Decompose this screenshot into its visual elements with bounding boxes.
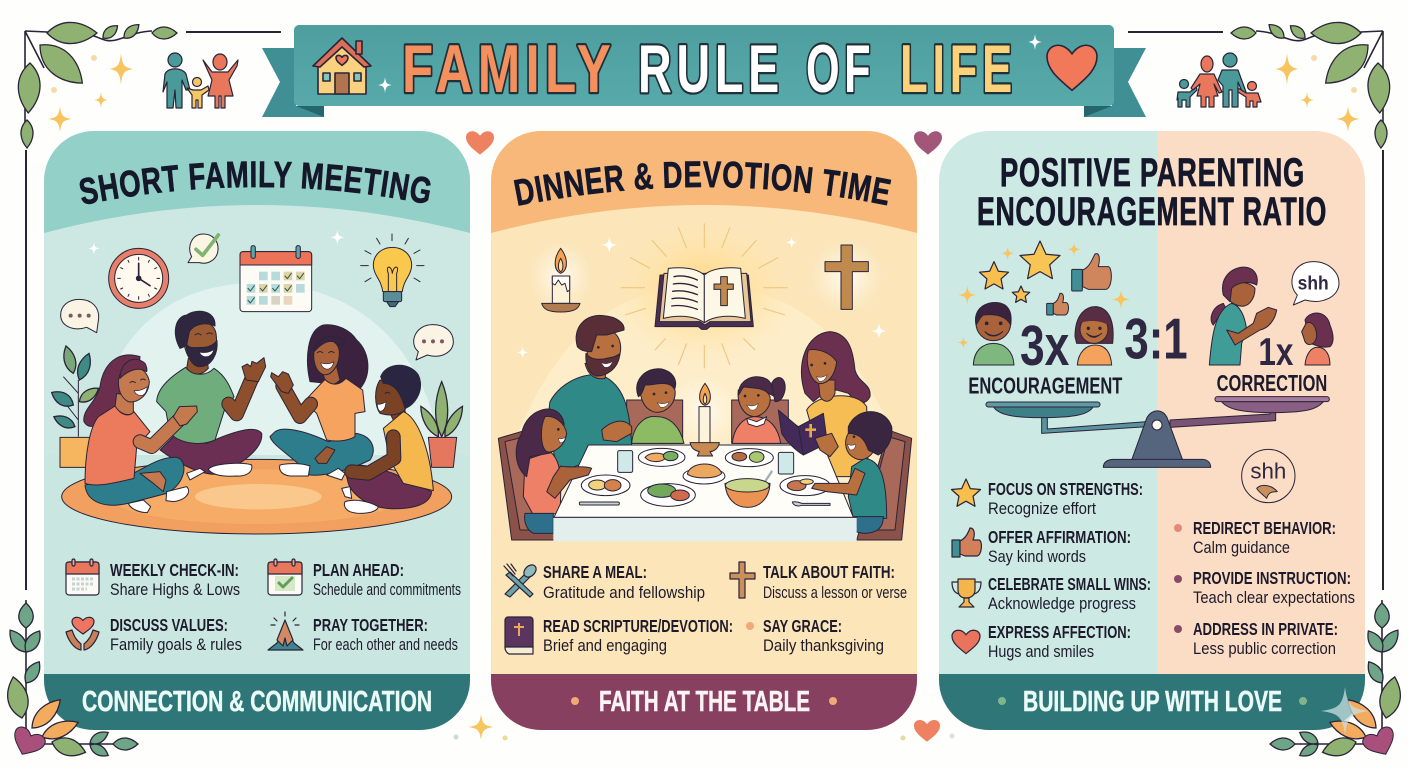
illustration: family dinner — [498, 213, 912, 541]
list: dinner items — [504, 562, 907, 655]
heading: SHORT FAMILY MEETING — [80, 161, 431, 204]
item: redirect behavior: Calm guidance — [1193, 538, 1290, 557]
icon: calendar — [240, 246, 312, 312]
decoration: top left vine — [17, 21, 177, 148]
parent correcting child — [1209, 262, 1339, 365]
item: focus on strengths: Recognize effort — [988, 499, 1096, 518]
icon: shh circle — [1242, 449, 1295, 503]
footer band: building up with love — [939, 674, 1365, 730]
list: encouragement items — [951, 479, 1151, 661]
item: offer affirmation: Say kind words — [988, 547, 1086, 566]
ratio 3:1: 3:1 — [1124, 307, 1188, 371]
speech text shh: shh — [1298, 273, 1329, 294]
ratio 1x: 1x — [1258, 330, 1293, 374]
icon: bible — [505, 617, 533, 654]
item: provide instruction — [1193, 568, 1355, 607]
illustration: balance scale — [957, 241, 1339, 503]
footer band: connection and communication — [44, 674, 470, 730]
arm: son right reaching to plate — [812, 468, 865, 495]
list: meeting items — [66, 559, 461, 654]
footer band: connection and communication: CONNECTION & COMMUNICATION — [82, 686, 432, 718]
heading — [977, 151, 1327, 234]
item: provide instruction: PROVIDE INSTRUCTION: — [1193, 568, 1351, 588]
label encouragement: ENCOURAGEMENT — [968, 372, 1122, 398]
table — [553, 445, 857, 541]
title banner — [262, 25, 1146, 117]
icon: plan calendar — [268, 559, 302, 595]
ribbon tail right — [1084, 48, 1146, 117]
item: share a meal: Gratitude and fellowship — [543, 583, 705, 602]
icon: praying hands — [268, 612, 303, 650]
title text: RULE — [638, 31, 784, 107]
light rays — [621, 223, 788, 368]
item: pray together: PRAY TOGETHER: — [313, 615, 428, 635]
item: read scripture: Brief and engaging — [543, 636, 667, 655]
item: redirect behavior: REDIRECT BEHAVIOR: — [1193, 518, 1336, 538]
title text — [402, 31, 1017, 107]
icon: wall candle — [542, 248, 580, 312]
panel: short family meeting — [44, 131, 470, 730]
item: say grace: SAY GRACE: — [763, 616, 842, 636]
icon: family of four — [1177, 53, 1261, 107]
icon: coral heart between panels — [466, 131, 494, 155]
icon: faint corner sparkle — [1321, 687, 1369, 735]
arm: child left reaching to table — [547, 466, 592, 498]
item: focus on strengths — [988, 479, 1143, 518]
icon: star — [951, 479, 981, 506]
icon: shh circle: shh — [1250, 459, 1286, 484]
scale — [986, 397, 1329, 467]
children receiving encouragement — [973, 302, 1113, 365]
item: celebrate small wins — [988, 574, 1151, 613]
chairs — [498, 400, 912, 540]
title text: FAMILY — [402, 31, 616, 107]
item: address in private — [1193, 619, 1338, 658]
decoration: bottom left plant — [4, 600, 138, 761]
illustration: family meeting — [49, 230, 467, 534]
item: share a meal — [543, 562, 705, 602]
item: provide instruction: Teach clear expectations — [1193, 588, 1355, 607]
item: weekly check-in — [110, 564, 240, 598]
panel: dinner and devotion time — [491, 131, 917, 730]
panel header — [44, 131, 470, 233]
icon: small cross — [730, 562, 755, 598]
bible held by mother — [778, 410, 838, 457]
panel: positive parenting encouragement ratio — [939, 131, 1365, 730]
ratio 3x: 3x — [1020, 315, 1070, 378]
title text: OF — [806, 31, 875, 107]
person: son — [342, 365, 433, 513]
item: weekly check-in: WEEKLY CHECK-IN: — [110, 560, 239, 580]
person: daughter — [84, 355, 197, 513]
item: discuss values: DISCUSS VALUES: — [110, 615, 228, 635]
person: child left at table — [516, 409, 567, 533]
item: read scripture: READ SCRIPTURE/DEVOTION: — [543, 616, 733, 636]
item: celebrate small wins: Acknowledge progress — [988, 594, 1136, 613]
icon: hands and heart — [66, 617, 99, 650]
item: discuss values — [110, 619, 242, 654]
item: share a meal: SHARE A MEAL: — [543, 562, 647, 582]
item: offer affirmation — [988, 527, 1131, 566]
item: plan ahead — [314, 564, 461, 595]
icon: clock — [109, 248, 169, 308]
icon: plant right — [420, 380, 464, 468]
item: talk about faith: Discuss a lesson or verse — [763, 583, 907, 602]
footer band: faith at the table — [491, 674, 917, 730]
decoration: bottom right plant — [1270, 600, 1404, 761]
icon: thumbs up — [952, 528, 981, 557]
person: son right at table — [846, 412, 892, 533]
rug — [62, 459, 452, 534]
icon: cross — [825, 245, 868, 309]
icon: plant left — [49, 345, 101, 467]
item: redirect behavior — [1193, 518, 1336, 557]
ribbon body — [294, 25, 1114, 106]
icon: family of three — [163, 53, 238, 108]
icon: coral heart bottom — [914, 720, 940, 742]
heading: DINNER & DEVOTION TIME — [514, 161, 892, 206]
list: correction items — [1174, 518, 1355, 658]
item: talk about faith — [763, 562, 907, 602]
item: plan ahead: PLAN AHEAD: — [313, 560, 404, 580]
person: father — [157, 311, 266, 480]
label correction: CORRECTION — [1217, 370, 1327, 396]
icon: heart — [952, 630, 980, 654]
item: weekly check-in: Share Highs & Lows — [110, 580, 240, 599]
person: son at table — [632, 369, 684, 443]
ribbon tail left — [262, 48, 324, 117]
item: express affection: Hugs and smiles — [988, 642, 1094, 661]
item: celebrate small wins: CELEBRATE SMALL WINS: — [988, 574, 1151, 594]
item: plan ahead: Schedule and commitments — [313, 580, 461, 599]
icon: heart — [1047, 45, 1097, 90]
item: address in private: ADDRESS IN PRIVATE: — [1193, 619, 1338, 639]
background dome — [515, 286, 895, 540]
item: address in private: Less public correction — [1193, 639, 1336, 658]
item: offer affirmation: OFFER AFFIRMATION: — [988, 527, 1131, 547]
item: say grace — [763, 616, 884, 655]
person: mother — [270, 325, 373, 480]
item: pray together — [314, 619, 458, 650]
item: express affection — [988, 622, 1131, 661]
table candle — [690, 383, 719, 456]
icon: check bubble — [188, 234, 218, 263]
item: pray together: For each other and needs — [313, 635, 458, 654]
icon: stars and thumbs — [957, 241, 1130, 349]
icon: fork and spoon — [504, 563, 538, 597]
person: mother at table — [801, 332, 870, 477]
item: focus on strengths: FOCUS ON STRENGTHS: — [988, 479, 1143, 499]
icon: gold star bottom center — [468, 714, 494, 740]
icon: speech bubble left — [61, 299, 99, 333]
icon: house — [313, 38, 371, 94]
item: read scripture — [543, 616, 733, 655]
title text: LIFE — [900, 31, 1017, 107]
decoration: top right vine — [1231, 21, 1391, 148]
background dome — [92, 283, 442, 455]
item: say grace: Daily thanksgiving — [763, 636, 884, 655]
table settings — [579, 448, 830, 507]
icon: speech bubble right — [414, 325, 453, 360]
footer band: faith at the table: FAITH AT THE TABLE — [599, 686, 810, 718]
footer band: building up with love: BUILDING UP WITH LOVE — [1023, 686, 1282, 718]
person: father at table — [549, 315, 632, 473]
item: talk about faith: TALK ABOUT FAITH: — [763, 562, 895, 582]
item: express affection: EXPRESS AFFECTION: — [988, 622, 1131, 642]
icon: light bulb — [361, 234, 424, 307]
person: daughter at table — [732, 377, 785, 443]
item: discuss values: Family goals & rules — [110, 635, 242, 654]
panel header — [491, 131, 917, 233]
icon: open bible — [655, 268, 753, 329]
icon: plum heart between panels — [914, 131, 942, 155]
icon: trophy — [952, 579, 981, 607]
icon: weekly calendar — [66, 559, 99, 595]
